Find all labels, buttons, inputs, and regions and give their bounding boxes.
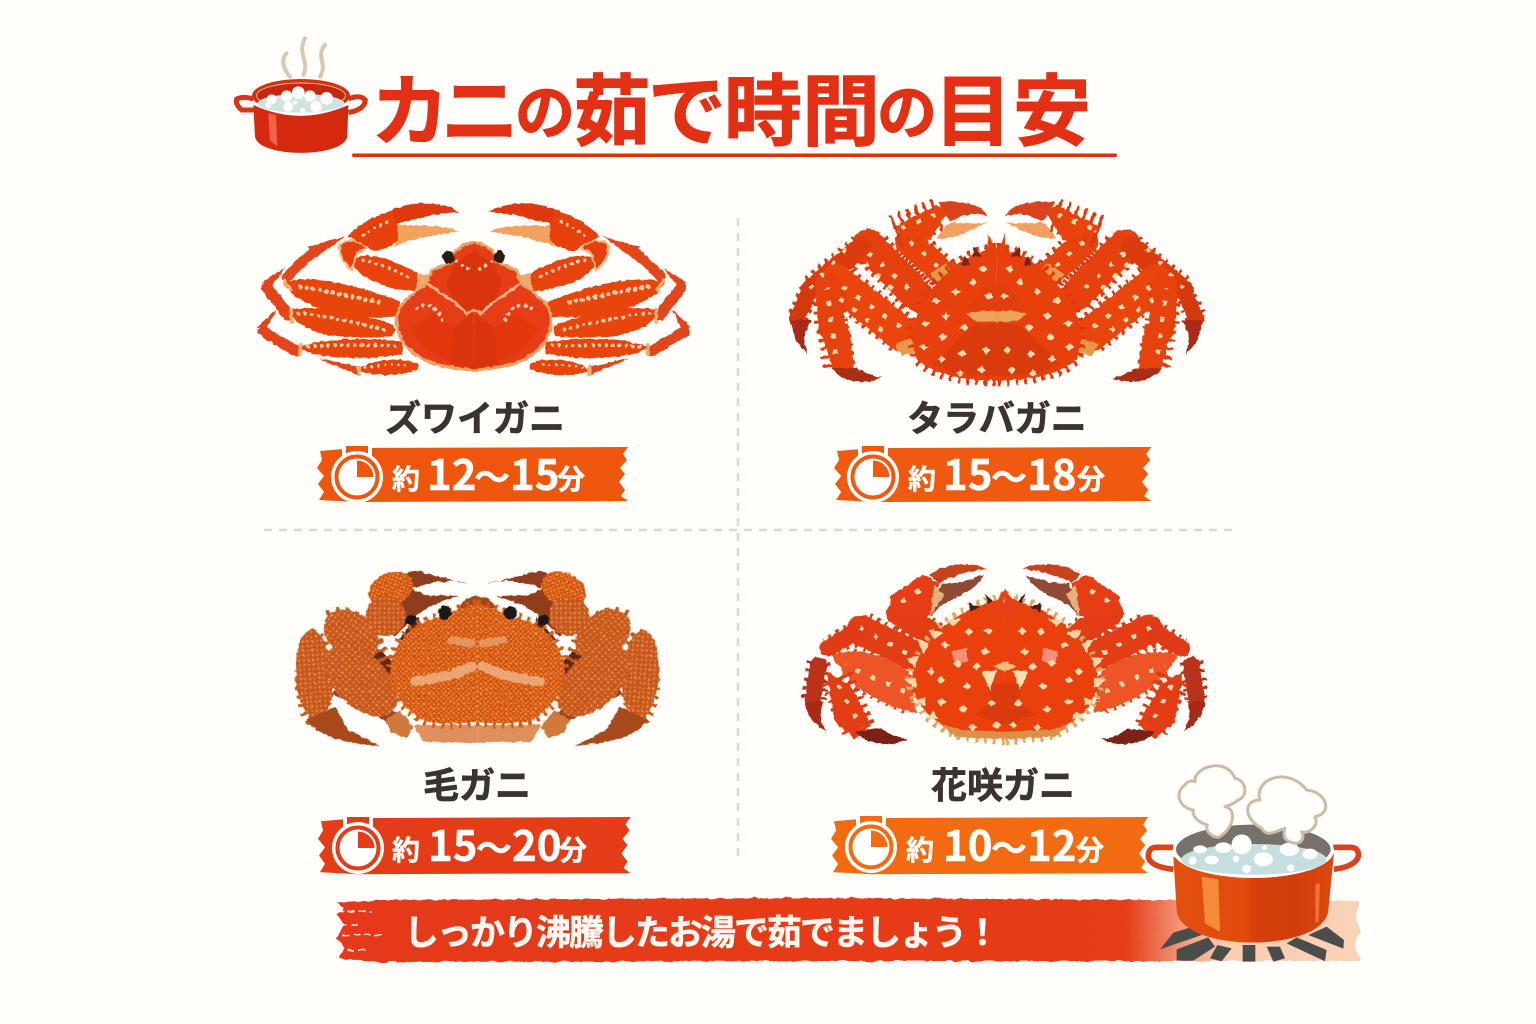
banner message: しっかり沸騰したお湯で茹でましょう！ [404, 905, 1000, 956]
steam clouds [1179, 766, 1326, 843]
time badge: 約 [908, 458, 936, 498]
time badge: 15 [943, 442, 993, 503]
pot rim and water [1173, 823, 1334, 878]
time badge: ～ [476, 820, 512, 872]
panel: タラバガニ [792, 201, 1202, 503]
time badge: 約 [906, 829, 934, 869]
icon: hanasaki crab [805, 564, 1205, 744]
pot handles [1148, 847, 1358, 869]
time badge: 10 [943, 813, 993, 874]
time badge: 12 [1027, 813, 1077, 874]
time badge: 18 [1027, 442, 1077, 503]
banner brush strip [336, 898, 1362, 962]
title: の [515, 65, 575, 152]
crab name: タラバガニ [907, 390, 1087, 442]
title: カ [371, 50, 449, 162]
title underline [352, 154, 1117, 157]
time badge: 約 [392, 458, 420, 498]
time badge: ～ [474, 449, 510, 501]
icon: king crab [792, 201, 1202, 382]
panel: 花咲ガニ [805, 564, 1205, 874]
time badge: 分 [557, 458, 585, 498]
icon: hairy crab [293, 564, 662, 746]
time badge: 12 [427, 442, 477, 503]
title: 目 [934, 50, 1012, 162]
title: 茹 [573, 50, 651, 162]
title: の [877, 65, 937, 152]
time badge: 分 [1077, 458, 1105, 498]
panel: 毛ガニ [293, 564, 662, 874]
title: 時 [724, 50, 802, 162]
crab name: ズワイガニ [385, 390, 565, 442]
icon: large boiling pot on burner [1148, 766, 1358, 962]
icon: small boiling pot [236, 38, 365, 153]
icon: snow crab [257, 203, 691, 375]
crab name: 毛ガニ [423, 757, 531, 809]
crab name: 花咲ガニ [931, 757, 1075, 809]
time badge: 約 [392, 829, 420, 869]
title: 間 [802, 50, 880, 162]
time badge: 分 [1076, 829, 1104, 869]
time badge [317, 442, 628, 503]
bottom banner [336, 898, 1362, 962]
time badge: 分 [559, 829, 587, 869]
time badge [318, 813, 631, 874]
pot body [1173, 853, 1334, 942]
burner [1160, 927, 1344, 962]
panel: ズワイガニ [257, 203, 691, 503]
time badge: 15 [510, 442, 560, 503]
header: title with pot icon [236, 38, 1117, 162]
time badge: 20 [512, 813, 562, 874]
time badge: ～ [991, 449, 1027, 501]
title: 安 [1013, 50, 1091, 162]
time badge [831, 813, 1148, 874]
time badge: ～ [991, 820, 1027, 872]
time badge: 15 [428, 813, 478, 874]
time badge [834, 442, 1151, 503]
title: ニ [441, 50, 519, 162]
title: で [648, 50, 726, 162]
